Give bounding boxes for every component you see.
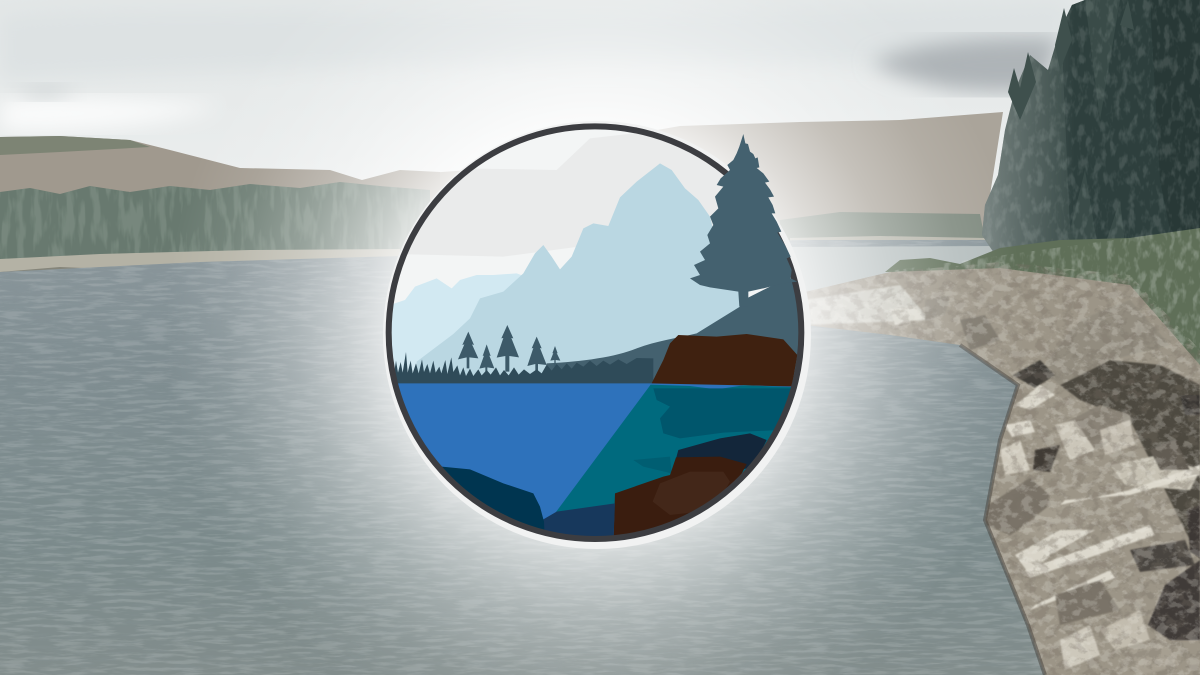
lighter rock blob: [653, 472, 730, 515]
dark blue bottom-left rock: [442, 466, 544, 530]
background: sky: [0, 0, 1200, 300]
background: far shoreline: [0, 236, 985, 277]
teal water section: [555, 385, 800, 517]
small pine trees: [458, 325, 560, 375]
background: rocky shore: [805, 250, 1200, 675]
brown lake rock: [613, 457, 747, 543]
fir tips along forest edge: [1008, 0, 1134, 120]
emblem: [370, 120, 820, 550]
faded hills inside emblem: [408, 134, 724, 256]
background: right forest: [982, 0, 1200, 251]
emblem backdrop: [390, 128, 800, 538]
far mountain range: [392, 274, 522, 373]
outer white ring: [383, 121, 811, 549]
blue lake: [398, 383, 791, 535]
navy lake rock: [676, 433, 766, 469]
background: shoreline bushes: [885, 228, 1200, 373]
background: lake water: [0, 240, 1100, 675]
grass band: [394, 352, 654, 384]
dark hillside: [547, 277, 803, 390]
clipped landscape: [383, 163, 803, 550]
navy bottom rock: [544, 504, 615, 536]
brown rock upper: [651, 334, 797, 389]
main mountain: [417, 163, 747, 377]
circular dark ring: [389, 126, 801, 539]
teal highlight: [633, 457, 672, 473]
background: left forest: [0, 180, 430, 264]
soft white glow behind emblem: [165, 0, 1025, 675]
background: far mountains: [0, 112, 1003, 250]
darker teal bands: [653, 388, 797, 438]
tall pine tree: [690, 134, 797, 307]
dark waterline: [960, 345, 1045, 675]
